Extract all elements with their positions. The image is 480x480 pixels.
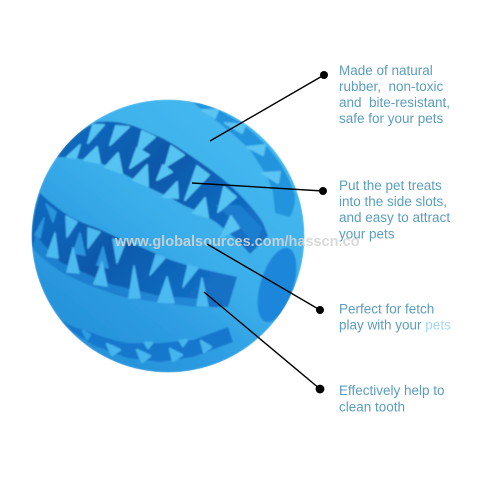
leader line: side slots (192, 183, 327, 195)
right slot (194, 102, 296, 217)
upper slot shaded patch (215, 205, 262, 245)
lower slot (60, 320, 233, 362)
middle slot teeth (35, 204, 208, 306)
lower slot teeth (83, 331, 211, 362)
side hole (257, 248, 297, 322)
text: side slots: Put the pet treats (339, 178, 442, 193)
text: natural rubber: Made of natural (339, 63, 433, 78)
text: side slots: into the side slots, (339, 194, 447, 209)
text: clean tooth: clean tooth (339, 400, 405, 414)
text: natural rubber: rubber, non-toxic (339, 79, 444, 94)
ball body (32, 100, 304, 372)
upper slot teeth (67, 125, 239, 237)
text: side slots: your pets (339, 226, 395, 242)
middle slot lit base (32, 236, 203, 307)
text: clean tooth: Effectively help to (339, 383, 445, 398)
leader line: clean tooth (204, 292, 324, 393)
text: fetch play: play with your pets (339, 318, 451, 332)
leader line: fetch play (207, 244, 324, 314)
middle slot (31, 193, 237, 307)
upper slot (57, 121, 268, 254)
text: fetch play: Perfect for fetch (339, 302, 434, 316)
text: side slots: and easy to attract (339, 210, 450, 225)
leader line: natural rubber (210, 71, 328, 141)
infographic (32, 65, 450, 412)
text: natural rubber: safe for your pets (339, 111, 444, 126)
right slot teeth (202, 110, 280, 183)
watermark: www.globalsources.com/hasscn.co (114, 234, 360, 250)
text: natural rubber: and bite-resistant, (339, 95, 450, 110)
rubber ball (31, 100, 305, 372)
